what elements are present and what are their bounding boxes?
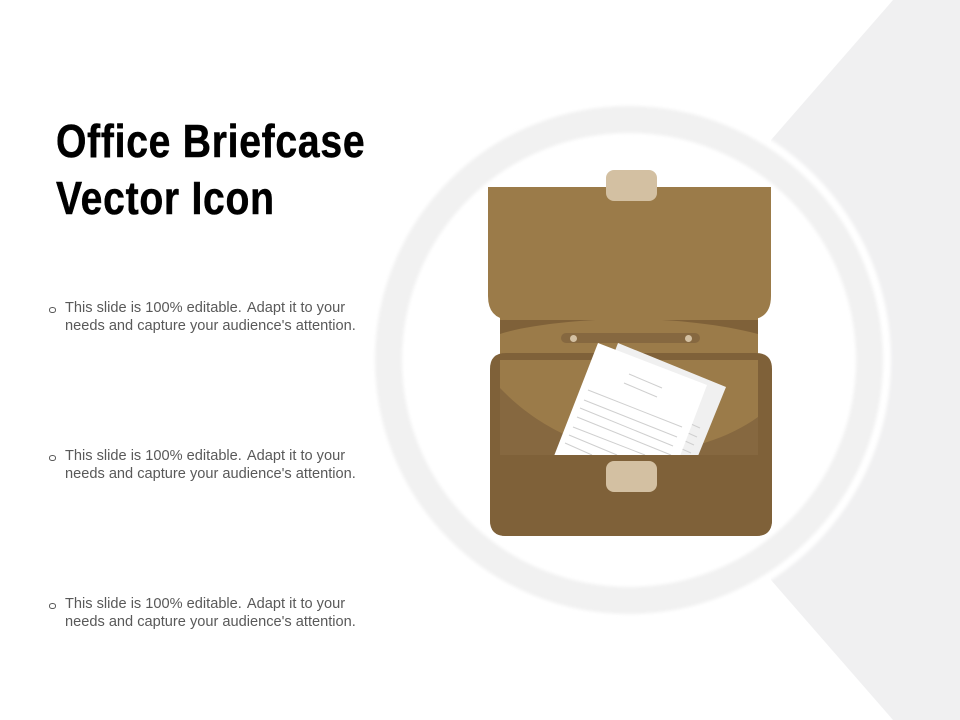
back paper [575,343,726,456]
pocket interior [500,360,758,456]
front paper [554,343,707,456]
bullet text 3 [49,596,356,630]
briefcase body frame [490,353,772,536]
bullet text 1: This slide is 100% editable. Adapt it to your [65,300,345,316]
white halo ring [367,98,891,622]
bullet text 3: needs and capture your audience's attention. [65,614,356,630]
pocket highlight [500,360,758,452]
strap rivets [570,335,692,342]
bottom clasp [606,461,657,492]
bullet text 2: needs and capture your audience's attention. [65,466,356,482]
back paper lines [682,424,700,453]
top clasp [606,170,657,201]
briefcase front pocket [490,455,772,536]
handle strap [561,333,700,343]
bullet text 1 [49,300,356,334]
title [56,115,365,224]
bullet text 2: This slide is 100% editable. Adapt it to your [65,448,345,464]
briefcase lid [488,187,771,320]
grey arrow shape [771,0,960,720]
title: Office Briefcase [56,115,365,167]
back wall shadow band [500,319,758,334]
icon: open briefcase [488,170,772,536]
grey ring [388,120,870,600]
briefcase back wall [500,318,758,458]
bullet text 1: needs and capture your audience's attention. [65,318,356,334]
bullet text 2 [49,448,356,482]
front paper lines [565,374,682,455]
bullet text 3: This slide is 100% editable. Adapt it to your [65,596,345,612]
title: Vector Icon [56,172,275,224]
